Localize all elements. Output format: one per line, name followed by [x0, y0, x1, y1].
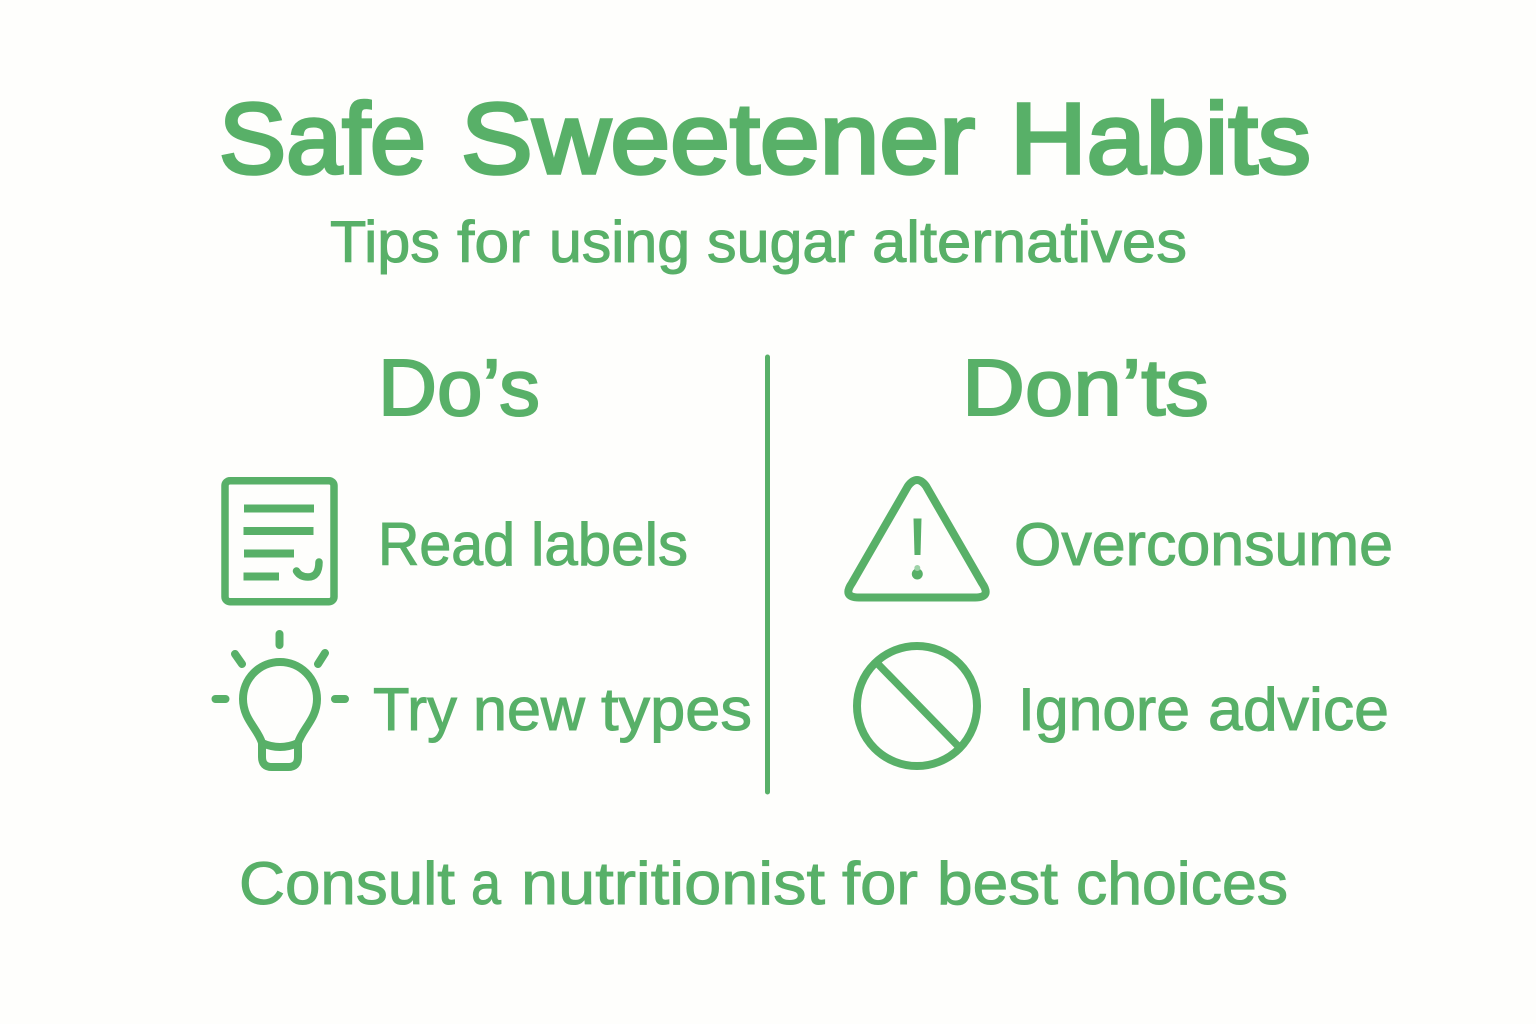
- title: [219, 83, 1311, 195]
- footer text: nutritionist: [521, 850, 825, 917]
- subtitle: for: [457, 210, 530, 275]
- label: read labels: labels: [531, 511, 688, 578]
- panel: don'ts: [848, 343, 1393, 766]
- panel: do's: [216, 343, 752, 767]
- title: Sweetener: [461, 83, 975, 195]
- label: overconsume: Overconsume: [1014, 511, 1393, 578]
- label: ignore advice: advice: [1208, 676, 1389, 743]
- label: try new types: [373, 676, 752, 743]
- footer text: best: [937, 850, 1058, 917]
- subtitle: using: [549, 210, 690, 275]
- icon: prohibition sign: [857, 646, 977, 766]
- label: ignore advice: Ignore: [1018, 676, 1190, 743]
- label: read labels: [378, 511, 688, 578]
- subtitle: [330, 210, 1187, 275]
- title: Safe: [219, 83, 426, 195]
- label: try new types: new: [473, 676, 586, 743]
- footer text: for: [842, 850, 918, 917]
- label: try new types: types: [601, 676, 752, 743]
- label: ignore advice: [1018, 676, 1389, 743]
- footer text: Consult: [239, 850, 455, 917]
- label: try new types: Try: [373, 676, 457, 743]
- heading: don'ts: Don’ts: [962, 343, 1209, 432]
- title: Habits: [1010, 83, 1311, 195]
- divider: [765, 357, 770, 792]
- heading: do's: Do’s: [378, 343, 540, 432]
- footer text: a: [471, 850, 502, 917]
- subtitle: Tips: [330, 210, 440, 275]
- footer text: [239, 850, 1288, 917]
- footer text: choices: [1076, 850, 1288, 917]
- icon: light bulb: [216, 634, 345, 767]
- icon: document with checklist: [225, 481, 334, 602]
- subtitle: alternatives: [872, 210, 1187, 275]
- label: read labels: Read: [378, 511, 515, 578]
- subtitle: sugar: [707, 210, 855, 275]
- icon: warning triangle: [848, 480, 986, 598]
